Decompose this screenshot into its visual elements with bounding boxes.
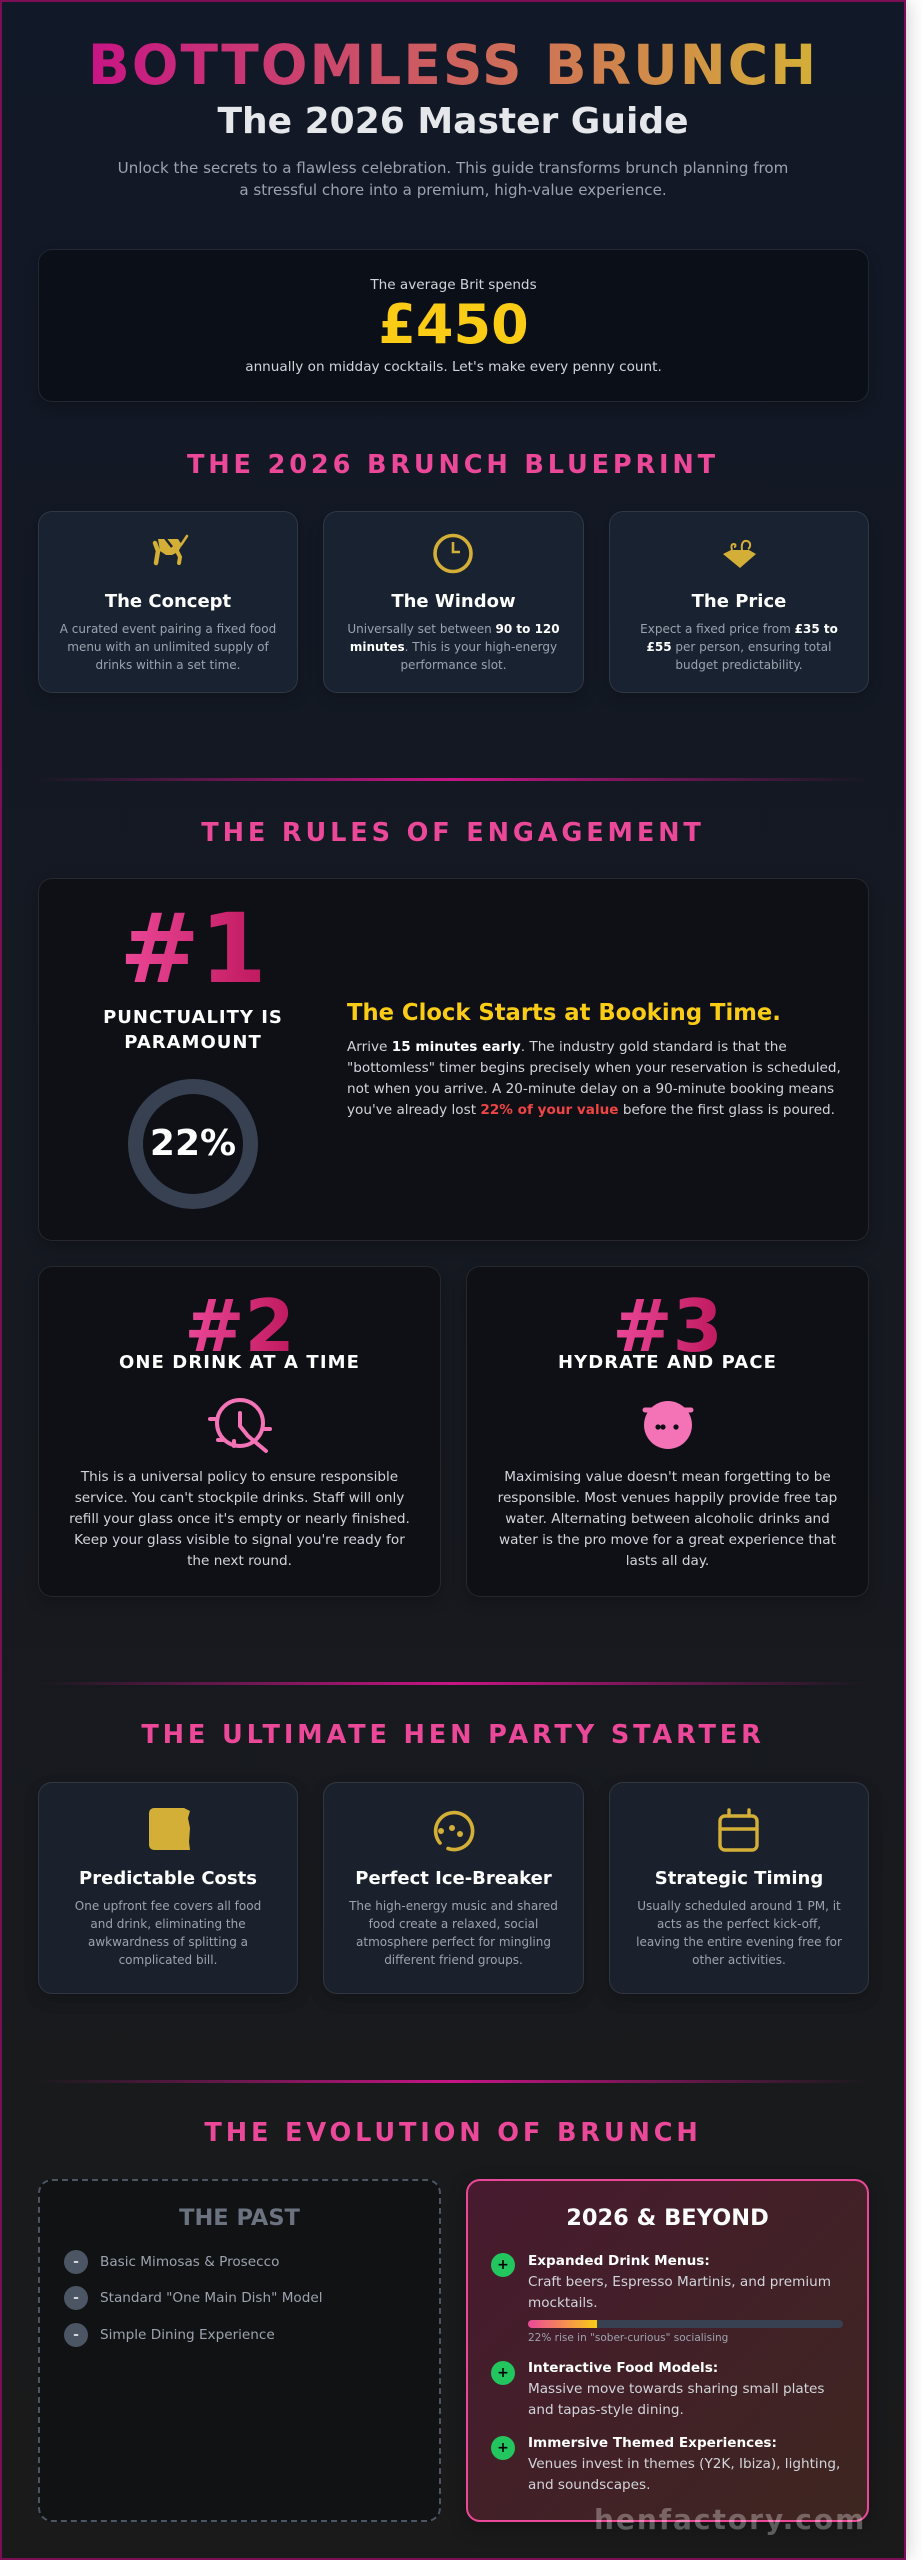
rule text: Maximising value doesn't mean forgetting to be [504, 1468, 831, 1484]
item text [528, 2434, 840, 2493]
card text: The high-energy music and shared [349, 1899, 558, 1913]
title: BOTTOMLESS BRUNCH [88, 33, 818, 97]
progress bar [528, 2320, 843, 2328]
heading: blueprint: THE 2026 BRUNCH BLUEPRINT [187, 450, 719, 480]
heading: evolution: THE EVOLUTION OF BRUNCH [204, 2118, 702, 2148]
bar fill [528, 2320, 597, 2328]
hero stat: £450 [378, 293, 529, 356]
rule text: "bottomless" timer begins precisely when your reservation is scheduled, [347, 1060, 841, 1076]
card text: food create a relaxed, social [369, 1917, 538, 1931]
card title: Perfect Ice-Breaker [355, 1868, 552, 1889]
minus badge: - [73, 2254, 79, 2270]
minus badge [64, 2286, 88, 2310]
panel: 2026 and beyond [466, 2179, 869, 2522]
list item [64, 2250, 279, 2274]
icon: water drop face [642, 1401, 694, 1449]
card text [640, 622, 838, 672]
rule text: not when you arrive. A 20-minute delay on a 90-minute booking means [347, 1081, 834, 1097]
rule title: ONE DRINK AT A TIME [119, 1352, 360, 1373]
card text: budget predictability. [675, 658, 803, 672]
rule title [103, 1006, 283, 1052]
panel: the price [609, 511, 869, 693]
minus badge: - [73, 2327, 79, 2343]
card text: A curated event pairing a fixed food [60, 622, 276, 636]
plus badge [491, 2253, 515, 2277]
item text: Interactive Food Models: [528, 2360, 718, 2376]
watermark: henfactory.com [594, 2503, 866, 2536]
card text [75, 1899, 261, 1967]
item text: Standard "One Main Dish" Model [100, 2290, 323, 2306]
card text: Expect a fixed price from £35 to [640, 622, 838, 636]
card text: leaving the entire evening free for [636, 1935, 842, 1949]
panel: rule 3 [466, 1266, 869, 1597]
panel: ice-breaker [323, 1782, 584, 1994]
plus badge: + [497, 2257, 509, 2273]
panel: rule 1 [38, 878, 869, 1241]
rule text [69, 1468, 410, 1569]
card text [636, 1899, 842, 1967]
card text: drinks within a set time. [96, 658, 240, 672]
card text: minutes. This is your high-energy [350, 640, 557, 654]
item text: Basic Mimosas & Prosecco [100, 2254, 279, 2270]
heading: rules: THE RULES OF ENGAGEMENT [201, 818, 705, 848]
icon: smile circle [434, 1810, 474, 1852]
rule number: #2 [184, 1284, 295, 1368]
rule text: Keep your glass visible to signal you're ready for [74, 1532, 405, 1548]
list item [64, 2323, 275, 2347]
plus badge [491, 2361, 515, 2385]
item text: Expanded Drink Menus: [528, 2252, 710, 2268]
rule number: #1 [119, 893, 267, 1005]
rule text: This is a universal policy to ensure responsible [81, 1468, 398, 1484]
rule text: responsible. Most venues happily provide free tap [498, 1490, 837, 1506]
card text: atmosphere perfect for mingling [356, 1935, 551, 1949]
rule title: HYDRATE AND PACE [558, 1352, 777, 1373]
panel: the concept [38, 511, 298, 693]
card text: performance slot. [400, 658, 507, 672]
rule text: service. You can't stockpile drinks. Staff will only [75, 1490, 404, 1506]
rule title: PUNCTUALITY IS [103, 1006, 283, 1028]
minus badge [64, 2250, 88, 2274]
panel: average spend hero [38, 249, 869, 402]
hero caption: annually on midday cocktails. Let's make every penny count. [245, 359, 662, 375]
subtitle: The 2026 Master Guide [217, 101, 689, 142]
panel: strategic timing [609, 1782, 869, 1994]
rule heading: The Clock Starts at Booking Time. [347, 1000, 781, 1026]
ring stat 22%: 22% [150, 1123, 236, 1164]
heading: hen party starter: THE ULTIMATE HEN PARTY STARTER [141, 1720, 765, 1750]
bar caption: 22% rise in "sober-curious" socialising [528, 2332, 728, 2344]
item text: Massive move towards sharing small plates [528, 2381, 824, 2397]
card text: complicated bill. [119, 1953, 217, 1967]
icon: wallet [149, 1808, 190, 1850]
icon: calendar [718, 1808, 759, 1852]
dashed outline [38, 2179, 441, 2522]
card title: The Window [391, 591, 516, 612]
rule text [498, 1468, 837, 1569]
card text: awkwardness of splitting a [88, 1935, 248, 1949]
card text: Usually scheduled around 1 PM, it [637, 1899, 841, 1913]
intro text: Unlock the secrets to a flawless celebration. This guide transforms brunch planning from [118, 159, 788, 177]
rule text: water is the pro move for a great experience that [499, 1532, 836, 1548]
panel title: 2026 & BEYOND [566, 2205, 769, 2231]
card text: acts as the perfect kick-off, [657, 1917, 821, 1931]
card text [60, 622, 276, 672]
list item [64, 2286, 323, 2310]
rule text: Arrive 15 minutes early. The industry gold standard is that the [347, 1038, 787, 1054]
item text: and soundscapes. [528, 2477, 650, 2493]
card title: The Concept [105, 591, 231, 612]
card text [347, 622, 560, 672]
icon: price [723, 540, 756, 568]
panel title: THE PAST [179, 2205, 300, 2231]
rule number: #3 [612, 1284, 723, 1368]
card text [349, 1899, 558, 1967]
rule text: refill your glass once it's empty or nearly finished. [69, 1511, 410, 1527]
item text [528, 2252, 831, 2311]
icon: timer clock [208, 1398, 272, 1454]
item text: Simple Dining Experience [100, 2327, 275, 2343]
rule title: PARAMOUNT [124, 1032, 262, 1052]
panel: the past [38, 2179, 441, 2522]
item text: Immersive Themed Experiences: [528, 2434, 777, 2450]
card text: other activities. [692, 1953, 786, 1967]
card title: Strategic Timing [655, 1868, 823, 1889]
minus badge: - [73, 2290, 79, 2306]
panel: the window [323, 511, 584, 693]
plus badge [491, 2436, 515, 2460]
ring stat 22% [128, 1079, 258, 1209]
rule text: you've already lost 22% of your value before the first glass is poured. [347, 1102, 835, 1118]
panel: predictable costs [38, 1782, 298, 1994]
rule text: lasts all day. [626, 1553, 709, 1569]
plus badge: + [497, 2440, 509, 2456]
intro text: a stressful chore into a premium, high-value experience. [239, 180, 667, 198]
card title: The Price [692, 591, 786, 612]
item text: Craft beers, Espresso Martinis, and premium [528, 2274, 831, 2290]
item text: and tapas-style dining. [528, 2402, 684, 2418]
card text: One upfront fee covers all food [75, 1899, 261, 1913]
plus badge: + [497, 2365, 509, 2381]
card title: Predictable Costs [79, 1868, 257, 1889]
minus badge [64, 2323, 88, 2347]
item text: Venues invest in themes (Y2K, Ibiza), lighting, [528, 2456, 840, 2472]
card text: £55 per person, ensuring total [646, 640, 831, 654]
card text: menu with an unlimited supply of [67, 640, 269, 654]
panel: rule 2 [38, 1266, 441, 1597]
card text: Universally set between 90 to 120 [347, 622, 560, 636]
icon: concept [152, 534, 188, 566]
rule text: water. Alternating between alcoholic drinks and [505, 1511, 830, 1527]
item text [528, 2360, 824, 2418]
item text: mocktails. [528, 2295, 598, 2311]
icon: clock [433, 534, 473, 574]
rule text [347, 1038, 841, 1118]
rule text: the next round. [187, 1553, 292, 1569]
hero intro text: The average Brit spends [370, 277, 537, 293]
intro text [118, 159, 788, 198]
card text: and drink, eliminating the [90, 1917, 246, 1931]
card text: different friend groups. [384, 1953, 523, 1967]
